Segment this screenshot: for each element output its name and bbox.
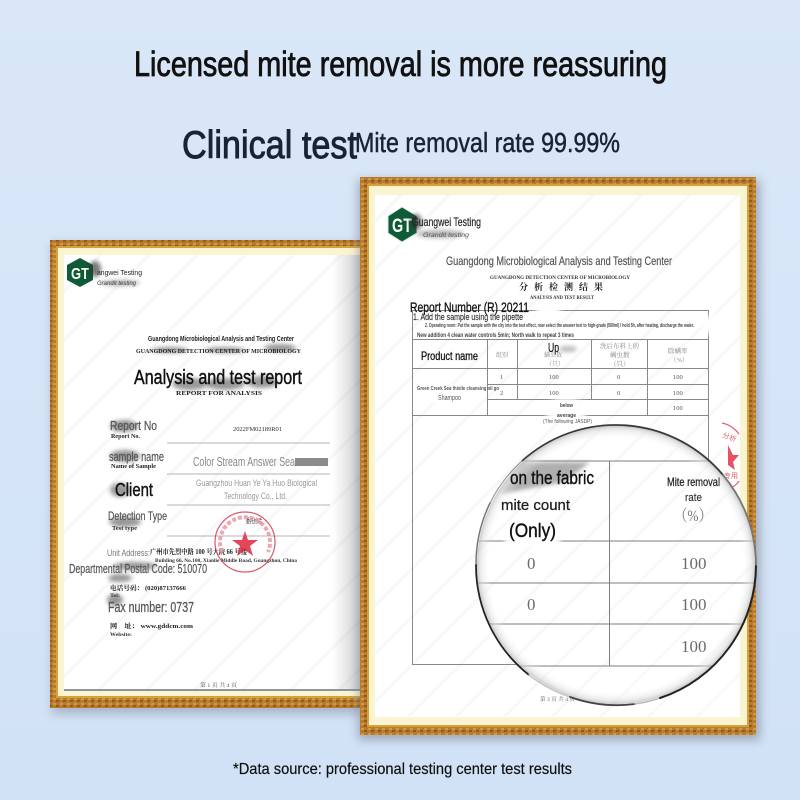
smudges — [107, 344, 296, 606]
test procedure notes: New addition 4 clean water controls 5min; North walk to repeat 3 times — [417, 332, 574, 339]
contact details — [69, 547, 297, 638]
test procedure notes — [413, 312, 694, 339]
magnified values — [527, 554, 706, 656]
icon: left logo — [67, 258, 101, 287]
magnified values: 0 — [527, 595, 536, 614]
magnifier — [476, 425, 756, 705]
sample name field: Color Stream Answer Sea — [193, 454, 296, 469]
table values: 100 — [549, 374, 559, 381]
icon: red stamp — [215, 512, 275, 572]
right center name: Guangdong Microbiological Analysis and Testing Center — [446, 254, 672, 268]
table headers: 螨虫数 — [610, 350, 630, 359]
client field: Technology Co., Ltd. — [224, 491, 287, 502]
heading: clinical test: Clinical test — [182, 124, 357, 167]
left center english: GUANGDONG DETECTION CENTER OF MICROBIOLOGY — [136, 348, 301, 355]
client field: Client — [115, 480, 153, 500]
panel: left certificate — [50, 240, 364, 714]
table headers: （只） — [610, 360, 630, 368]
contact details: 电话号码： (020)87137666 — [110, 583, 187, 592]
panel: right certificate — [358, 177, 760, 740]
table headers: 螨虫数 — [544, 351, 562, 359]
sample name field: Name of Sample — [111, 463, 156, 470]
contact details: Building 66, No.100, Xianlie Middle Road, Guangzhou, China — [155, 558, 297, 564]
magnified table — [478, 460, 754, 666]
test procedure notes: 1. Add the sample using the pipette — [413, 312, 523, 322]
icon: right logo — [388, 207, 422, 242]
table headers: Up — [548, 340, 559, 355]
magnified column: mite count: mite count — [501, 498, 570, 514]
sample name field — [109, 449, 328, 470]
icon: right stamp: 专用 — [724, 471, 738, 480]
footnote: *Data source: professional testing center test results — [233, 761, 572, 778]
magnified column: mite count — [501, 468, 594, 542]
right logo name: Grandit testing — [423, 233, 470, 239]
magnified column: removal rate: Mite removal — [667, 475, 720, 489]
subheading: removal rate: Mite removal rate 99.99% — [355, 127, 620, 158]
white patches over table — [416, 301, 720, 422]
table values: 100 — [673, 405, 683, 412]
table values: 1 — [500, 374, 503, 381]
left page number: 第 1 页 共 4 页 — [200, 681, 238, 689]
table: test results — [410, 299, 720, 664]
sample name field: sample name — [109, 449, 164, 464]
contact details: Unit Address: — [107, 548, 150, 558]
magnified column: removal rate — [667, 475, 720, 525]
table headers: 洗后布料上的 — [600, 341, 640, 350]
contact details: Tel: — [110, 593, 120, 599]
left logo name — [97, 268, 142, 287]
table headers: （%） — [670, 356, 688, 364]
table values: 100 — [673, 390, 683, 397]
magnified values: 100 — [681, 554, 706, 573]
magnified column: removal rate: rate — [685, 492, 702, 504]
right english subtitle: ANALYSIS AND TEST RESULT — [530, 296, 595, 301]
client field — [115, 478, 317, 502]
detection type field: 委托检验 — [246, 516, 262, 525]
contact details: 广州市先烈中路 100 号大院 66 号楼 — [150, 547, 248, 556]
left center name: Guangdong Microbiological Analysis and Testing Center — [148, 334, 294, 343]
magnified column: mite count: on the fabric — [510, 468, 594, 488]
report number field: Report No — [110, 418, 157, 433]
left logo name: Grandit testing — [97, 281, 137, 287]
report number heading: Report Number (R) 20211 — [410, 299, 529, 315]
magnified column: removal rate: （%） — [674, 508, 712, 525]
table values: 2 — [500, 390, 503, 397]
form divider lines — [167, 443, 330, 536]
icon: right logo: GT — [392, 216, 412, 237]
table values: 0 — [617, 374, 620, 381]
right chinese title: 分析检测结果 — [519, 281, 603, 292]
table values: 100 — [673, 374, 683, 381]
average row label: below — [560, 403, 574, 409]
detection type field: Detection Type — [108, 509, 167, 523]
product label — [417, 386, 499, 402]
magnified column: mite count: (Only) — [509, 521, 556, 542]
table headers: Product name — [421, 349, 478, 363]
contact details: 网 址： www.gddcm.com — [110, 621, 194, 630]
contact details: Website: — [110, 632, 132, 638]
test procedure notes: 2. Operating room: Put the sample with the city into the test effect, now select the answer test to high-grade (500ml) I hold 5h, after heating, discharge the water. — [425, 323, 694, 329]
lens rim — [476, 425, 756, 705]
lens edge shading — [476, 425, 756, 705]
product label: Green Creek Sea thistle cleansing oil go — [417, 386, 499, 392]
report number field — [110, 418, 282, 440]
table headers: 除螨率 — [668, 346, 688, 355]
title: Licensed mite removal is more reassuring — [134, 45, 667, 84]
client field: Guangzhou Huan Ye Ya Huo Biological — [196, 478, 317, 489]
table values — [500, 374, 683, 412]
table values: 0 — [617, 390, 620, 397]
report number field: Report No. — [111, 433, 140, 440]
contact details: Departmental Postal Code: 510070 — [69, 561, 207, 576]
right page number: 第 3 页 共 4 页 — [540, 695, 575, 703]
detection type field: Test type — [112, 526, 137, 532]
magnified values: 0 — [527, 554, 536, 573]
left report title: Analysis and test report — [134, 367, 302, 389]
report number field: 2022FM02189R01 — [233, 426, 282, 433]
right logo name — [412, 215, 481, 239]
table headers: 组别 — [496, 351, 508, 359]
magnified values: 100 — [681, 595, 706, 614]
magnified values: 100 — [681, 637, 706, 656]
product label: Shampoo — [438, 395, 461, 402]
right logo name: Guangwei Testing — [412, 215, 481, 229]
table headers: （只） — [546, 360, 564, 368]
icon: left logo: GT — [71, 266, 89, 283]
left logo name: angwei Testing — [97, 268, 142, 277]
left report subtitle: REPORT FOR ANALYSIS — [176, 390, 262, 397]
right center english: GUANGDONG DETECTION CENTER OF MICROBIOLOGY — [490, 276, 630, 281]
lens smudges — [500, 462, 590, 546]
contact details: Fax number: 0737 — [108, 599, 194, 616]
table values: 100 — [549, 390, 559, 397]
icon: right stamp: 分析 — [721, 430, 738, 444]
detection type field — [108, 509, 262, 532]
average row label: average — [557, 413, 576, 419]
average row label: (The following JASDP) — [543, 419, 592, 425]
table headers — [421, 340, 688, 368]
icon: right stamp — [721, 423, 739, 488]
average row label — [543, 403, 592, 425]
